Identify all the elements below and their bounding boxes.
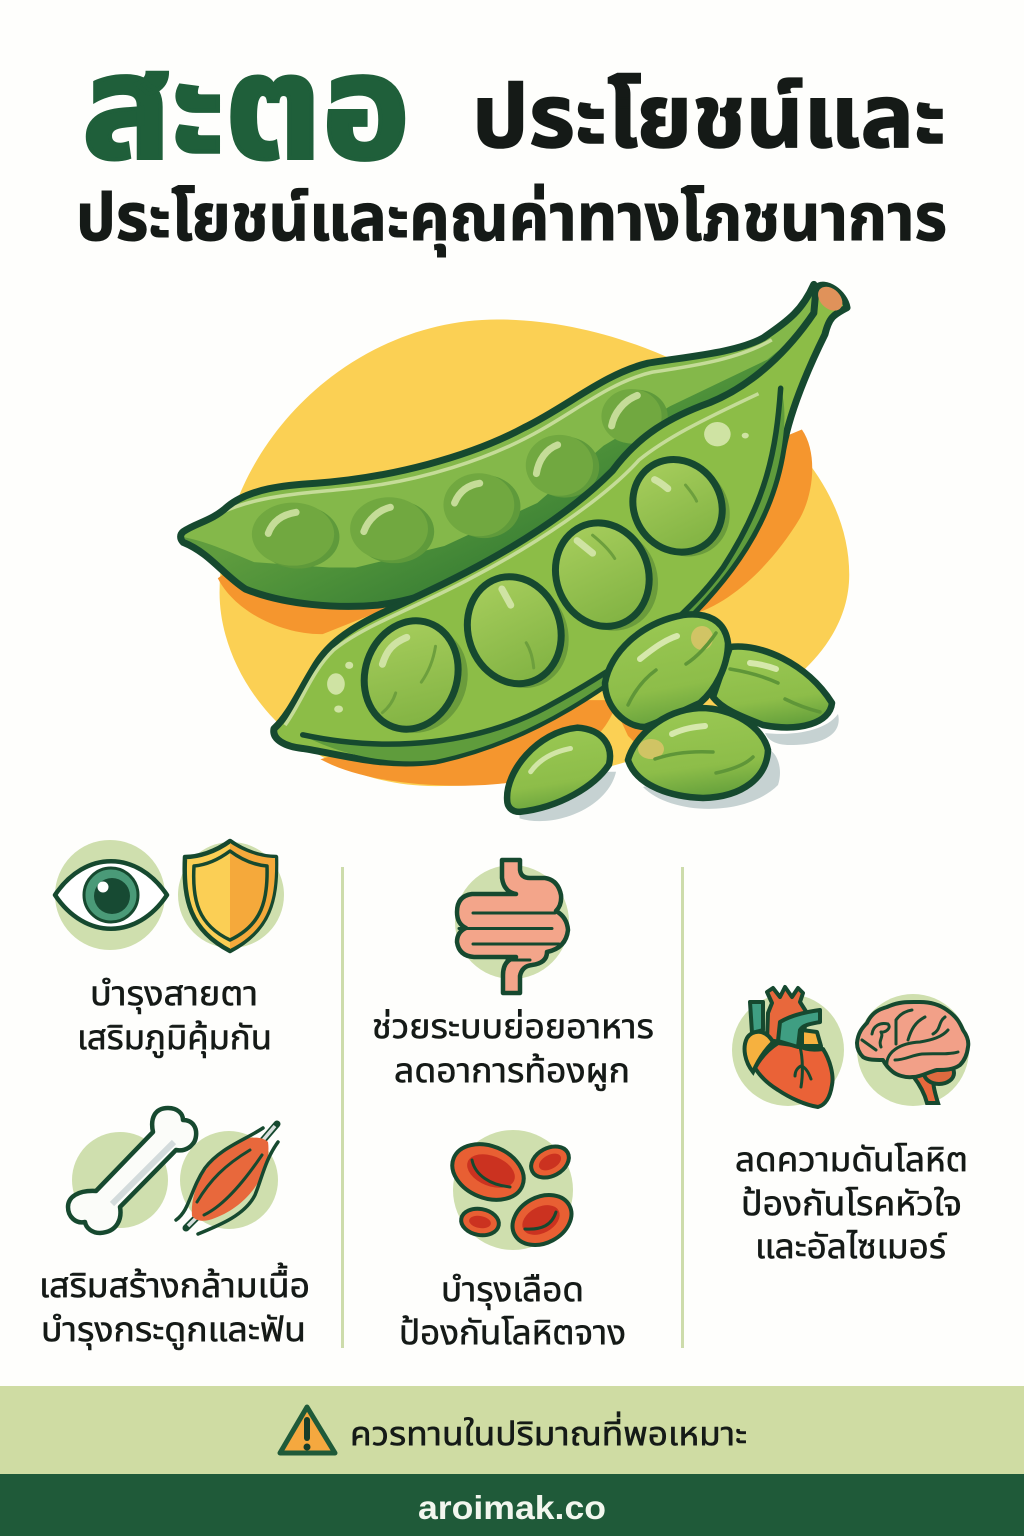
front pod rim highlight (285, 394, 759, 725)
icon: brain (857, 994, 969, 1106)
stem cut end (813, 283, 847, 314)
shadow under small bean (520, 772, 616, 821)
back pod (181, 284, 825, 628)
pea highlights (382, 480, 668, 664)
orange shadow shapes (218, 429, 812, 786)
shadow under right bean (765, 714, 839, 745)
title word: benefits: ประโยชน์และ (472, 67, 946, 166)
bean blush (691, 626, 713, 650)
icon: warning triangle (280, 1407, 335, 1453)
bean creases (628, 633, 820, 773)
icon: eye (55, 840, 167, 950)
label: eyes and immunity: เสริมภูมิคุ้มกัน (77, 1019, 272, 1058)
subtitle: ประโยชน์และคุณค่าทางโภชนาการ (76, 180, 947, 257)
footer band (0, 1474, 1024, 1536)
label: blood: ป้องกันโลหิตจาง (399, 1314, 626, 1352)
title word: sator: สะตอ (82, 26, 410, 189)
footer url: aroimak.co (418, 1489, 606, 1526)
yellow sun backdrop (220, 319, 849, 786)
loose bean front (628, 708, 768, 798)
label: muscle and bone (39, 1262, 310, 1350)
front pod darker edge band (303, 388, 784, 761)
loose bean top (605, 614, 728, 727)
front pod peas (356, 454, 739, 738)
label: digestion: ช่วยระบบย่อยอาหาร (372, 1008, 654, 1046)
label: blood pressure, heart and alzheimer's (735, 1141, 968, 1266)
back pod peas (252, 389, 668, 569)
bean highlights (640, 636, 776, 734)
warning text: ควรทานในปริมาณที่พอเหมาะ (350, 1411, 747, 1452)
label: blood: บำรุงเลือด (441, 1271, 584, 1310)
column dividers (341, 867, 684, 1348)
label: blood pressure, heart and alzheimer's: ป้องกันโรคหัวใจ (741, 1185, 962, 1223)
back pod dark lower band (184, 350, 779, 603)
label: blood pressure, heart and alzheimer's: และอัลไซเมอร์ (755, 1228, 948, 1266)
loose bean right (713, 646, 832, 727)
loose bean small (507, 728, 610, 812)
icon: heart (732, 987, 844, 1107)
pod droplets (327, 422, 749, 713)
title (76, 26, 947, 257)
back pod highlights (268, 395, 637, 533)
label: blood (399, 1271, 626, 1352)
label: eyes and immunity: บำรุงสายตา (90, 975, 258, 1014)
label: blood pressure, heart and alzheimer's: ลดความดันโลหิต (735, 1141, 968, 1179)
back pod outline (181, 284, 825, 606)
label: muscle and bone: เสริมสร้างกล้ามเนื้อ (39, 1262, 310, 1305)
shadow under front bean (643, 750, 780, 809)
label: muscle and bone: บำรุงกระดูกและฟัน (41, 1311, 306, 1350)
label: eyes and immunity (77, 975, 272, 1058)
front pod (274, 285, 847, 763)
pea creases (382, 485, 697, 713)
label: digestion (372, 1008, 654, 1091)
icon: bone (68, 1108, 196, 1233)
back pod rim highlight (205, 340, 772, 521)
front pod seam (303, 388, 781, 744)
label: digestion: ลดอาการท้องผูก (394, 1052, 630, 1091)
icon: intestine (455, 860, 569, 993)
icon: shield (178, 841, 284, 951)
icon: muscle (176, 1124, 278, 1234)
loose beans group (605, 614, 839, 809)
warning band (0, 1386, 1024, 1474)
icon: red blood cells (444, 1130, 580, 1255)
